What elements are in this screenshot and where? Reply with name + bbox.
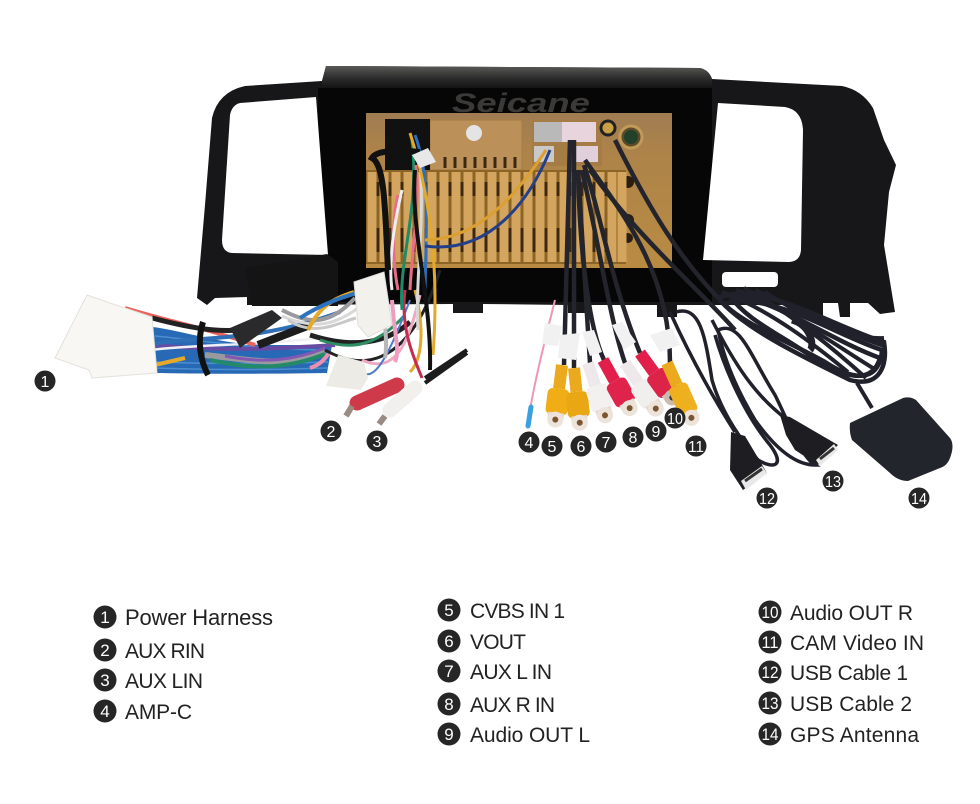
callout 8 [622, 426, 644, 448]
blue wire bundle [153, 327, 332, 374]
callout 3 [366, 430, 388, 452]
second connector [326, 355, 368, 390]
legend column 2 [438, 598, 590, 747]
callout 5 [542, 436, 562, 456]
legend item 4 [94, 700, 192, 724]
callout 10 [664, 408, 686, 428]
RCA plug 8 [593, 355, 643, 420]
callout 6: 6 [577, 439, 586, 456]
callout 13 [822, 470, 844, 492]
legend item 1: Power Harness [125, 605, 273, 630]
gold head unit [366, 113, 672, 268]
legend item 12: 12 [762, 663, 778, 682]
coloured wires [150, 345, 335, 349]
callout 8: 8 [629, 430, 638, 447]
legend item 3 [94, 668, 203, 693]
legend item 11: 11 [762, 633, 778, 652]
legend item 2 [94, 638, 205, 663]
legend item 13: USB Cable 2 [790, 693, 912, 716]
callout 9: 9 [652, 424, 661, 441]
legend item 5 [438, 598, 565, 623]
third connector [354, 272, 392, 337]
legend item 7: AUX L IN [470, 661, 552, 684]
cable tie [412, 148, 436, 168]
legend item 7 [438, 660, 552, 684]
legend item 7: 7 [444, 662, 454, 681]
callout numbers [34, 370, 930, 508]
legend item 10: 10 [762, 603, 778, 622]
callout 7: 7 [602, 435, 611, 452]
radio bezel frame [197, 66, 896, 320]
AMP-C terminal [528, 407, 531, 426]
callout 2 [320, 420, 342, 442]
legend item 1: 1 [100, 608, 110, 627]
main connector [55, 295, 157, 378]
watermark: Seicane [452, 88, 590, 118]
callout 14: 14 [911, 491, 927, 508]
legend item 6: VOUT [470, 631, 526, 654]
legend item 14: 14 [762, 725, 778, 744]
callout 6 [570, 436, 592, 456]
callout 12 [756, 488, 778, 508]
legend item 5: CVBS IN 1 [470, 600, 565, 623]
RCA plug 9 [616, 357, 669, 421]
USB plug 12 [730, 432, 767, 490]
legend item 13: 13 [762, 694, 778, 713]
legend item 8: 8 [444, 695, 454, 714]
power harness [125, 270, 440, 378]
legend item 3: AUX LIN [125, 670, 203, 693]
cooling fins [366, 170, 626, 264]
RCA plug 10 [631, 347, 686, 410]
legend item 6 [438, 630, 526, 654]
left window [222, 97, 328, 255]
USB plug 13 [780, 415, 838, 466]
callout 4 [518, 432, 540, 452]
RCA cable trunk [564, 140, 735, 368]
callout 1 [34, 370, 56, 392]
legend item 4: 4 [100, 702, 110, 721]
legend item 8 [438, 692, 555, 717]
callout 12: 12 [759, 491, 775, 508]
callout 14 [908, 488, 930, 508]
GPS antenna [850, 397, 952, 481]
callout 1: 1 [41, 374, 50, 391]
RCA plug 5 [543, 364, 573, 429]
callout 4: 4 [525, 435, 534, 452]
legend column 1 [94, 605, 273, 724]
right window [703, 103, 803, 262]
bezel slot [722, 272, 778, 287]
callout 5: 5 [548, 439, 557, 456]
legend item 5: 5 [444, 601, 454, 620]
legend item 2: AUX RIN [125, 640, 205, 663]
legend item 11: CAM Video IN [790, 632, 924, 655]
legend item 4: AMP-C [125, 701, 192, 724]
callout 9 [646, 420, 666, 442]
AUX plugs [346, 350, 467, 424]
legend item 9: 9 [444, 725, 454, 744]
legend item 14: GPS Antenna [790, 724, 919, 747]
control box [245, 254, 338, 306]
USB and GPS cable coils [670, 288, 885, 465]
callout 7 [596, 432, 616, 452]
callout 11: 11 [688, 439, 704, 456]
legend item 3: 3 [100, 671, 110, 690]
RCA plug 11 [658, 359, 704, 429]
callout 11 [686, 436, 706, 456]
wires to head unit [372, 133, 555, 410]
callout 13: 13 [825, 474, 841, 491]
legend item 10: Audio OUT R [790, 602, 913, 625]
callout 10: 10 [667, 411, 683, 428]
legend item 12: USB Cable 1 [790, 662, 908, 685]
RCA plug 7 [578, 360, 618, 426]
legend item 9: Audio OUT L [470, 724, 590, 747]
legend item 2: 2 [100, 641, 110, 660]
legend item 8: AUX R IN [470, 694, 555, 717]
RCA cable tags [542, 322, 680, 360]
legend column 3 [758, 600, 924, 747]
callout 2: 2 [327, 424, 336, 441]
blue wire highlights [155, 336, 328, 370]
RCA plug 6 [563, 367, 592, 432]
callout 3: 3 [373, 434, 382, 451]
legend item 6: 6 [444, 632, 454, 651]
